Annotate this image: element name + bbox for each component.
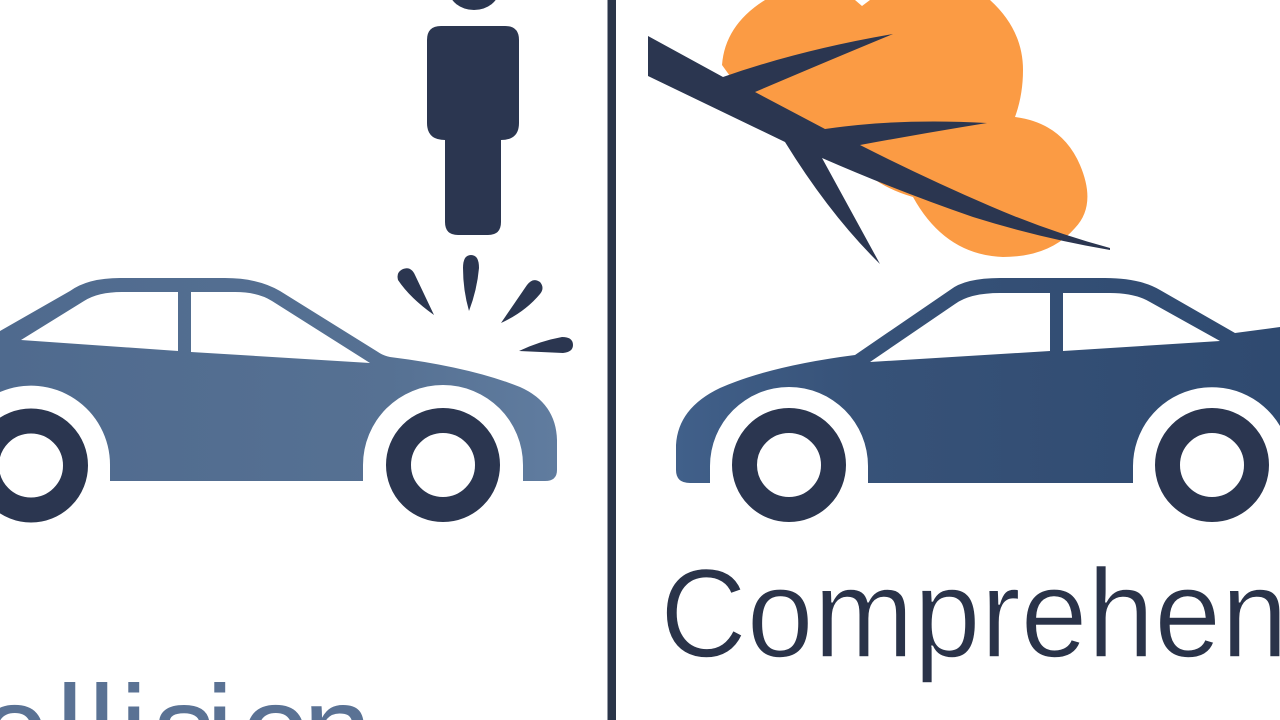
- window: rear: [21, 292, 178, 351]
- icon: collision car: [0, 278, 557, 510]
- window: front: [191, 292, 370, 363]
- icon: pedestrian: [427, 0, 519, 235]
- icon: fallen branch: [648, 34, 1110, 264]
- icon: impact marks: [398, 255, 573, 353]
- wheel: front: [744, 420, 834, 510]
- window: rear: [1063, 293, 1220, 351]
- icon: comprehensive car: [676, 278, 1280, 510]
- divider: [608, 0, 616, 720]
- window: front: [870, 293, 1050, 362]
- wheel: rear: [1168, 420, 1256, 510]
- icon: orange foliage: [722, 0, 1087, 257]
- wheel: front: [398, 420, 488, 510]
- wheel: rear: [0, 421, 76, 510]
